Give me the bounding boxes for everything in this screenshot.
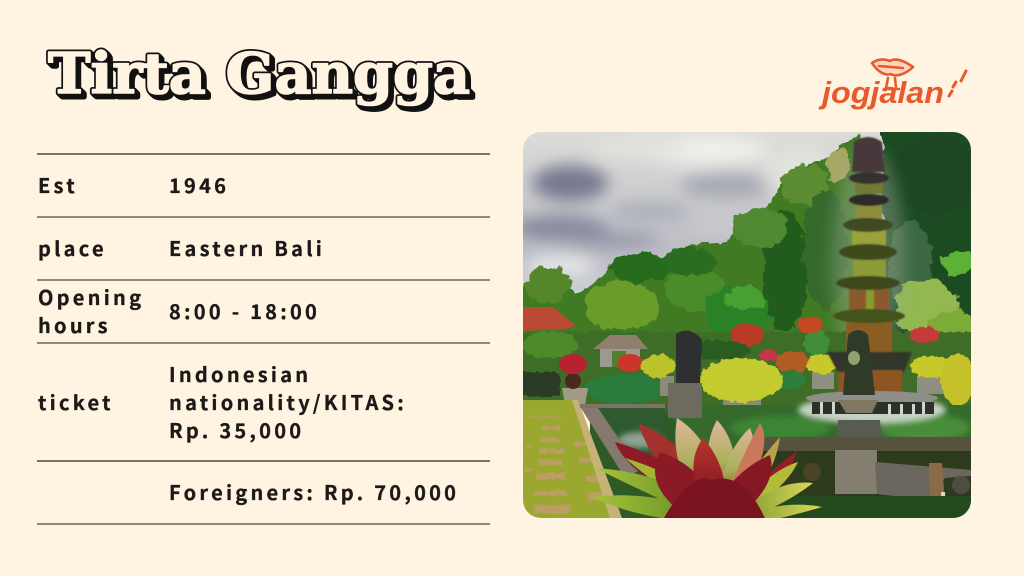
row: opening hours: 8:00 - 18:00 [169, 296, 320, 325]
statue in fountain [836, 330, 882, 437]
icon: lips and stupa above logo [872, 59, 913, 89]
icon: exclamation strokes [949, 71, 966, 96]
row: opening hours [38, 282, 320, 339]
row: established: 1946 [169, 170, 229, 199]
row: ticket Indonesian [38, 359, 407, 444]
row: established: Est [38, 170, 78, 199]
row: ticket foreigners: Foreigners: Rp. 70,000 [169, 477, 459, 506]
lower water [776, 496, 971, 518]
row: ticket Indonesian: Indonesian [169, 359, 311, 388]
stone wall [761, 437, 971, 496]
background gardens [515, 317, 980, 407]
pond [590, 405, 975, 520]
red core leaves [655, 452, 694, 505]
wordmark: jogjalan [818, 75, 944, 110]
fountain basin [798, 391, 946, 424]
hillside trees [523, 134, 882, 334]
left statue [668, 331, 702, 418]
row: place [38, 233, 325, 262]
stone path [523, 400, 622, 518]
back leaves [638, 423, 678, 460]
fountain tower [827, 137, 912, 398]
title: Tirta Gangga [48, 41, 470, 107]
red roof [523, 307, 576, 331]
fountain mist [832, 145, 904, 375]
row: place: Eastern Bali [169, 233, 325, 262]
side leaves [625, 458, 656, 479]
photo: Tirta Gangga water palace fountain [523, 132, 971, 518]
sky with clouds [523, 132, 971, 294]
row: place: place [38, 233, 107, 262]
hut [593, 335, 648, 372]
logo: jogjalan [818, 58, 968, 110]
red plant in pot [559, 354, 588, 405]
stone ledge top [580, 404, 665, 408]
dark trees right [880, 132, 971, 334]
row: opening hours: Opening [38, 282, 144, 311]
row: opening hours: hours [38, 310, 111, 339]
row: established [38, 170, 229, 199]
bromeliad plant [592, 418, 822, 528]
title: Tirta Gangga [48, 41, 470, 107]
row: ticket Indonesian: ticket [38, 387, 114, 416]
yellow shrubs and planters [640, 353, 971, 405]
stone ledge [579, 405, 640, 478]
row: ticket Indonesian: nationality/KITAS: [169, 387, 407, 416]
row: ticket Indonesian: Rp. 35,000 [169, 415, 304, 444]
